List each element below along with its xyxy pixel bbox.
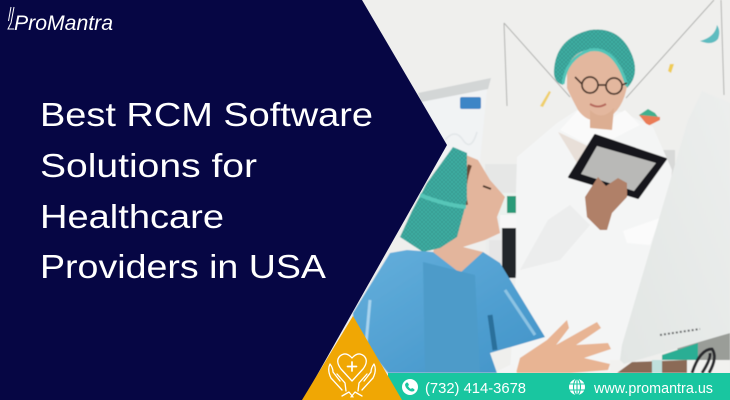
- photo: two medical workers: [340, 0, 730, 400]
- glasses: [575, 77, 627, 94]
- back shelves: [485, 150, 675, 285]
- desk items: [610, 333, 730, 373]
- contact bar: [388, 373, 730, 400]
- monitor: [620, 91, 730, 364]
- icon: heart in caring hands: [329, 354, 375, 397]
- hand holding tablet: [585, 177, 627, 230]
- title: Providers in USA: [40, 248, 326, 285]
- logo: ProMantra: ProMantra: [14, 12, 113, 35]
- phone number: (732) 414-3678: [425, 380, 526, 397]
- title: Solutions for: [40, 147, 257, 184]
- icon: globe: [569, 379, 585, 395]
- icon: phone: [402, 379, 418, 395]
- website: www.promantra.us: [593, 380, 713, 397]
- title: Healthcare: [40, 198, 224, 235]
- seated worker blue gown: [353, 250, 545, 373]
- whiteboard: [418, 78, 491, 165]
- older worker face: [567, 50, 628, 121]
- seated worker hair net: [400, 147, 467, 252]
- standing worker in white coat: [510, 30, 672, 372]
- gold triangle: [302, 316, 402, 400]
- navy title panel: [0, 0, 447, 400]
- office wall background: [340, 0, 730, 400]
- bunting strings and flags: [504, 0, 724, 126]
- seated worker hands: [516, 320, 611, 373]
- title: [40, 96, 373, 285]
- hair net: [554, 30, 635, 88]
- title: Best RCM Software: [40, 96, 373, 133]
- seated worker face and neck: [433, 155, 505, 280]
- tablet: [569, 135, 666, 198]
